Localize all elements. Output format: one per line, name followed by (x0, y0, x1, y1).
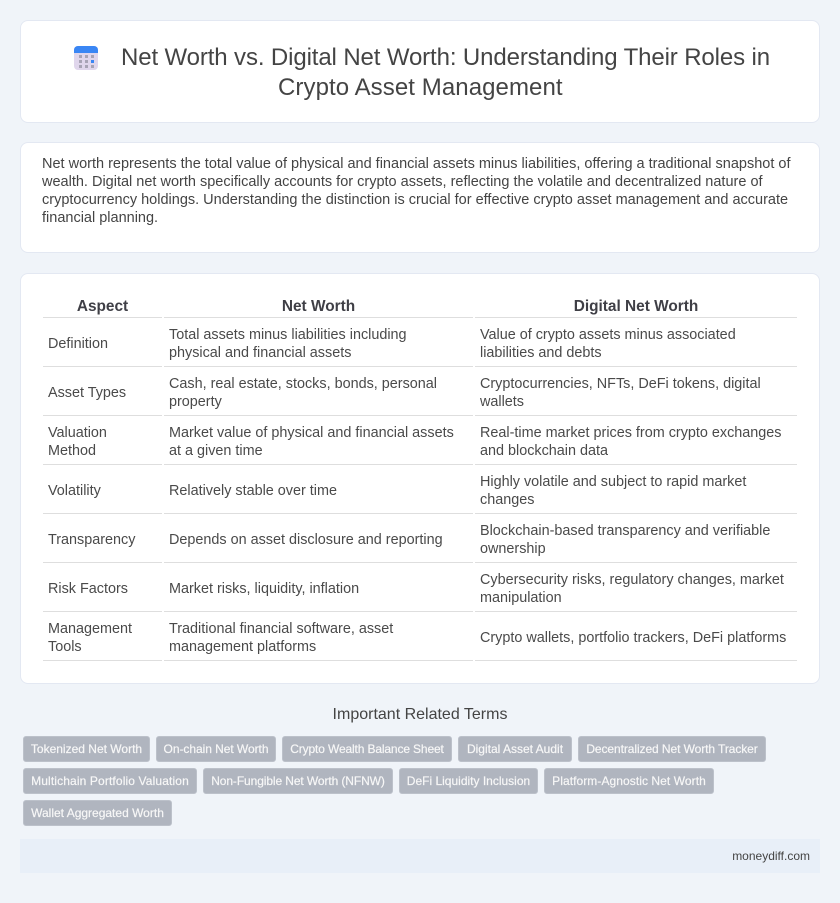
title (121, 44, 770, 100)
panel: intro text (20, 142, 820, 253)
row: Asset Types: Cryptocurrencies, NFTs, DeFi tokens, digital (480, 376, 761, 392)
table header: Net Worth (282, 298, 355, 315)
row: Volatility: Volatility (48, 483, 101, 499)
row: Transparency: Transparency (48, 532, 135, 548)
row: Management Tools: Management (48, 621, 132, 637)
row: Management Tools (48, 621, 786, 655)
tag (203, 768, 393, 794)
footer bar (20, 839, 820, 873)
icon: calendar (74, 46, 98, 70)
intro paragraph: Net worth represents the total value of physical and financial assets minus liabilities, offering a traditional snapshot of (42, 156, 791, 172)
tag: Multichain Portfolio Valuation (31, 774, 189, 788)
row: Asset Types: property (169, 394, 222, 410)
row: Valuation Method: at a given time (169, 443, 263, 459)
title: Crypto Asset Management (278, 74, 563, 100)
row: Risk Factors: manipulation (480, 590, 562, 606)
row: Valuation Method: and blockchain data (480, 443, 608, 459)
row: Volatility: changes (480, 492, 534, 508)
table header (77, 298, 698, 315)
tag (544, 768, 714, 794)
tag (23, 768, 197, 794)
related terms tags (23, 736, 766, 826)
tag: Tokenized Net Worth (31, 742, 142, 756)
heading: related terms: Important Related Terms (333, 706, 507, 723)
row: Transparency: Depends on asset disclosure and reporting (169, 532, 443, 548)
tag (458, 736, 572, 762)
intro paragraph: cryptocurrency holdings. Understanding the distinction is crucial for effective crypto asset management and accurate (42, 192, 788, 208)
row: Valuation Method (48, 425, 782, 459)
tag (23, 736, 150, 762)
row: Transparency: Blockchain-based transparency and verifiable (480, 523, 770, 539)
row: Management Tools: management platforms (169, 639, 316, 655)
tag: DeFi Liquidity Inclusion (407, 774, 530, 788)
tag: Non-Fungible Net Worth (NFNW) (211, 774, 385, 788)
row: Volatility (48, 474, 746, 508)
row: Valuation Method: Market value of physical and financial assets (169, 425, 454, 441)
row: Valuation Method: Real-time market prices from crypto exchanges (480, 425, 782, 441)
intro paragraph (42, 156, 791, 226)
row: Definition: liabilities and debts (480, 345, 602, 361)
tag (578, 736, 766, 762)
title: Net Worth vs. Digital Net Worth: Understanding Their Roles in (121, 44, 770, 71)
row: Transparency (48, 523, 770, 557)
footer source: moneydiff.com (732, 849, 810, 863)
row: Risk Factors: Cybersecurity risks, regulatory changes, market (480, 572, 784, 588)
tag: Platform-Agnostic Net Worth (552, 774, 706, 788)
row: Management Tools: Traditional financial software, asset (169, 621, 393, 637)
comparison table (43, 298, 797, 661)
row: Valuation Method: Valuation (48, 425, 107, 441)
row: Definition: physical and financial assets (169, 345, 351, 361)
row: Definition (48, 327, 736, 361)
row: Asset Types: Cash, real estate, stocks, bonds, personal (169, 376, 437, 392)
row: Management Tools: Tools (48, 639, 82, 655)
row: Volatility: Relatively stable over time (169, 483, 337, 499)
tag: Wallet Aggregated Worth (31, 806, 164, 820)
tag (156, 736, 276, 762)
intro paragraph: financial planning. (42, 210, 158, 226)
row: Asset Types (48, 376, 761, 410)
tag (282, 736, 452, 762)
tag (23, 800, 172, 826)
row: Definition: Definition (48, 336, 108, 352)
tag: On-chain Net Worth (164, 742, 268, 756)
intro paragraph: wealth. Digital net worth specifically accounts for crypto assets, reflecting the volatile and decentralized nature of (42, 174, 763, 190)
row: Asset Types: wallets (480, 394, 524, 410)
row: Valuation Method: Method (48, 443, 96, 459)
row: Asset Types: Asset Types (48, 385, 126, 401)
row: Risk Factors (48, 572, 784, 606)
row: Volatility: Highly volatile and subject to rapid market (480, 474, 746, 490)
row: Definition: Value of crypto assets minus associated (480, 327, 736, 343)
tag: Crypto Wealth Balance Sheet (290, 742, 444, 756)
row: Risk Factors: Market risks, liquidity, inflation (169, 581, 359, 597)
row: Risk Factors: Risk Factors (48, 581, 128, 597)
row: Definition: Total assets minus liabilities including (169, 327, 407, 343)
tag (399, 768, 538, 794)
panel: title card (20, 20, 820, 123)
table header: Digital Net Worth (574, 298, 698, 315)
panel: comparison table (20, 273, 820, 684)
tag: Digital Asset Audit (467, 742, 563, 756)
row: Transparency: ownership (480, 541, 546, 557)
row: Management Tools: Crypto wallets, portfolio trackers, DeFi platforms (480, 630, 786, 646)
table header: Aspect (77, 298, 128, 315)
tag: Decentralized Net Worth Tracker (586, 742, 758, 756)
